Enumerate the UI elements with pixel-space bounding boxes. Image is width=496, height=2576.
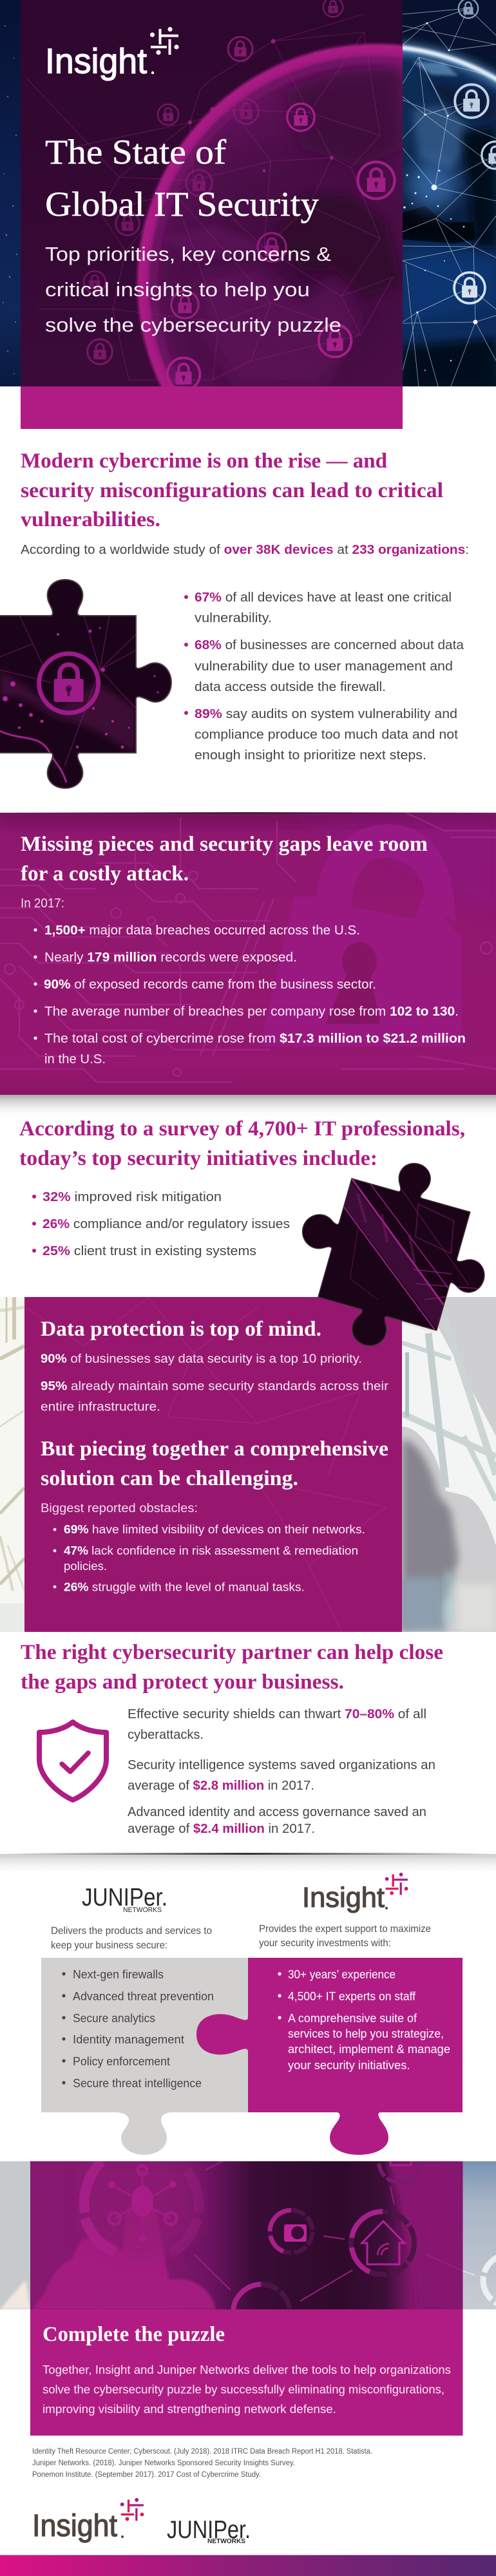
logo: Juniper footer: NETWORKS [207,2538,245,2545]
insight intro: Provides the expert support to maximize [259,1924,431,1935]
panel: data protection [0,1297,496,1632]
padlock shape [260,824,462,1046]
heading: challenging [41,1437,388,1490]
heading: challenging: solution can be challenging. [41,1467,298,1490]
references: Juniper Networks. (2018). Juniper Networks Sponsored Security Insights Survey. [32,2459,295,2467]
statistics bullets: data access outside the firewall. [195,680,386,694]
magenta text panel [24,1297,402,1632]
insight list: your security initiatives. [288,2059,410,2072]
study intro text: According to a worldwide study of over 38K devices at 233 organizations: [21,542,469,557]
data protection stats [41,1352,389,1414]
insight list: 30+ years’ experience [288,1968,396,1981]
subtitle: solve the cybersecurity puzzle [45,314,341,336]
puzzle piece: city photo [301,1163,485,1346]
logo: Insight colour [302,1873,408,1913]
heading: security misconfigurations can lead to critical [21,479,443,502]
icon: smart fan [270,2210,312,2253]
juniper list: Policy enforcement [73,2055,170,2068]
section background with circuit and lock [0,813,496,1095]
statistics bullets: compliance produce too much data and not [195,728,458,742]
insight list: architect, implement & manage [288,2043,450,2056]
juniper list: Secure analytics [73,2012,155,2025]
initiative bullets [32,1190,290,1258]
photo background [0,1297,496,1632]
heading [19,1117,465,1170]
photo side strips [0,2161,496,2309]
title: The State of [45,133,226,171]
insight list: services to help you strategize, [288,2027,444,2040]
obstacles: 69% have limited visibility of devices on their networks. [64,1523,365,1536]
savings text: average of $2.4 million in 2017. [128,1822,315,1836]
statistics bullets: vulnerability due to user management and [195,659,453,674]
logo: Insight white [45,27,179,81]
initiative bullets: 26% compliance and/or regulatory issues [43,1217,290,1231]
obstacles: 26% struggle with the level of manual tasks. [64,1580,305,1593]
right earth with city lights and network [403,0,496,386]
hero starfield background [0,0,496,386]
statistics bullets: 67% of all devices have at least one critical [195,591,452,605]
in 2017 label: In 2017: [21,896,64,911]
panel: modern cybercrime [0,450,469,792]
savings text: Advanced identity and access governance saved an [128,1805,426,1819]
panel: hero banner [0,0,496,386]
hand [32,2199,216,2309]
breach bullets: 1,500+ major data breaches occurred across the U.S. [44,923,360,938]
statistics bullets [184,591,464,762]
statistics bullets: enough insight to prioritize next steps. [195,748,426,762]
juniper list: Identity management [73,2033,184,2046]
magenta hero bar [21,386,403,429]
logo: Juniper footer: JUNIPer. [167,2516,251,2544]
title [45,133,319,223]
shadow [0,1095,496,1118]
savings text: average of $2.8 million in 2017. [128,1779,314,1793]
juniper intro [51,1926,212,1951]
icon: smart home [351,2211,414,2275]
breach bullets [33,923,466,1066]
statistics bullets: vulnerability. [195,611,272,625]
faint polygon pattern [26,1298,386,1632]
magenta band [30,2309,463,2436]
logo: Juniper: NETWORKS [123,1906,162,1914]
heading [21,833,428,886]
panel: complete the puzzle image [0,2161,496,2309]
logo: Insight footer: Insight [32,2509,117,2543]
data protection stats: entire infrastructure. [41,1400,160,1414]
heading [21,450,443,531]
purple overlay panel with globe [21,0,403,386]
insight list: 4,500+ IT experts on staff [288,1990,416,2003]
panel: missing pieces [0,812,496,1118]
icon: top ring [377,2161,423,2184]
heading: data protection: Data protection is top of mind. [41,1318,321,1341]
puzzle: purple piece [196,1958,463,2155]
insight list [278,1968,450,2072]
heading [21,1641,443,1694]
subtitle: Top priorities, key concerns & [45,243,331,265]
icon: network hub [84,2161,199,2254]
heading: Missing pieces and security gaps leave room [21,833,428,856]
breach bullets: The average number of breaches per company rose from 102 to 130. [44,1005,459,1019]
footer logos [32,2498,251,2545]
puzzle: grey piece [41,1958,248,2155]
panel: complete the puzzle text [30,2309,463,2436]
logo: Insight white: Insight [45,41,147,81]
obstacles [41,1502,365,1593]
logo: Juniper: JUNIPer. [82,1884,167,1911]
obstacles: policies. [64,1560,107,1573]
closing paragraph [43,2363,451,2416]
data protection stats: 95% already maintain some security standards across their [41,1379,389,1394]
juniper list: Next-gen firewalls [73,1968,164,1981]
icon: shield with check [39,1722,106,1800]
initiative bullets: 32% improved risk mitigation [43,1190,222,1204]
closing paragraph: solve the cybersecurity puzzle by successfully eliminating misconfigurations, [43,2383,444,2396]
subtitle: critical insights to help you [45,278,310,301]
juniper list: Secure threat intelligence [73,2077,202,2090]
obstacles: Biggest reported obstacles: [41,1502,198,1515]
heading: for a costly attack. [21,862,189,886]
panel: right cybersecurity partner [21,1641,443,1836]
statistics bullets: 89% say audits on system vulnerability and [195,707,457,721]
insight list: A comprehensive suite of [288,2012,417,2025]
breach bullets: in the U.S. [44,1052,106,1066]
closing paragraph: improving visibility and strengthening network defense. [43,2403,336,2416]
breach bullets: The total cost of cybercrime rose from $17.3 million to $21.2 million [44,1032,466,1046]
insight intro: your security investments with: [259,1938,391,1949]
references: Identity Theft Resource Center; Cyberscout. (July 2018). 2018 ITRC Data Breach Report H1 2018. Statista. [32,2448,372,2456]
heading: today’s top security initiatives include: [19,1147,377,1170]
heading: The right cybersecurity partner can help close [21,1641,443,1664]
savings text: Security intelligence systems saved organizations an [128,1758,435,1772]
heading: the gaps and protect your business. [21,1671,344,1694]
panel: partners [41,1873,463,2155]
heading: Modern cybercrime is on the rise — and [21,450,387,473]
connector lines [102,2161,463,2309]
title: Global IT Security [45,185,319,223]
divider shadow [0,1853,496,1876]
heading: vulnerabilities. [21,508,160,531]
subtitle [45,243,341,336]
savings text [128,1707,435,1836]
puzzle piece with lock [0,576,174,792]
breach bullets: 90% of exposed records came from the business sector. [44,978,376,992]
logo: Insight colour: Insight [302,1882,385,1913]
references [32,2448,372,2479]
juniper list [62,1968,214,2090]
insight intro [259,1924,431,1949]
icon: cloud ring [229,2282,292,2309]
references: Ponemon Institute. (September 2017). 2017 Cost of Cybercrime Study. [32,2471,261,2479]
heading: challenging: But piecing together a comprehensive [41,1437,388,1461]
logo: Insight footer [32,2498,144,2543]
magenta tinted photo [30,2161,463,2309]
savings text: Effective security shields can thwart 70–80% of all [128,1707,426,1721]
initiative bullets: 25% client trust in existing systems [43,1244,256,1258]
statistics bullets: 68% of businesses are concerned about data [195,638,464,652]
heading: Complete the puzzle [43,2323,225,2346]
panel: survey initiatives [19,1117,465,1258]
heading: According to a survey of 4,700+ IT professionals, [19,1117,465,1141]
closing paragraph: Together, Insight and Juniper Networks deliver the tools to help organizations [43,2363,451,2376]
top edge [0,812,496,813]
juniper intro: keep your business secure: [51,1940,167,1951]
juniper list: Advanced threat prevention [73,1990,214,2003]
obstacles: 47% lack confidence in risk assessment & remediation [64,1544,358,1557]
footer gradient bar [0,2555,496,2576]
juniper intro: Delivers the products and services to [51,1926,212,1937]
savings text: cyberattacks. [128,1728,204,1742]
data protection stats: 90% of businesses say data security is a top 10 priority. [41,1352,362,1366]
breach bullets: Nearly 179 million records were exposed. [44,951,297,965]
